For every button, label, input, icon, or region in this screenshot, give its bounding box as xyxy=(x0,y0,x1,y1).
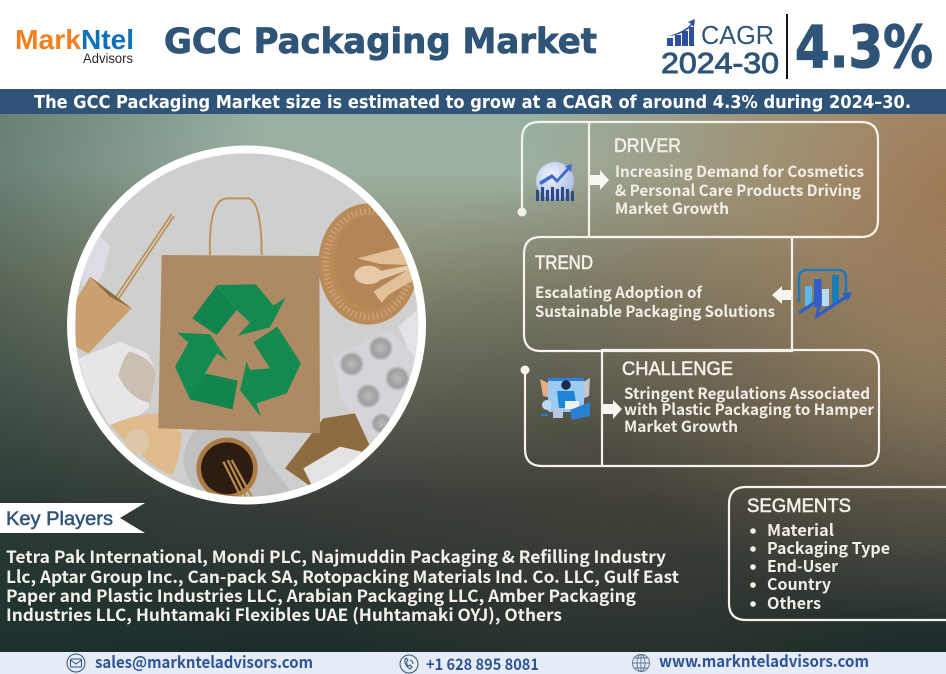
kraft bag xyxy=(210,198,262,255)
heading: challenge: CHALLENGE xyxy=(622,359,733,380)
list: segments: Material xyxy=(767,517,834,541)
text: driver description: Increasing Demand for Cosmetics xyxy=(615,160,864,182)
list: segments: Others xyxy=(767,590,821,614)
background panel xyxy=(0,114,946,652)
logo: MarkNtel Advisors: Advisors xyxy=(83,51,133,66)
white box xyxy=(78,342,157,427)
paper bowl xyxy=(110,413,182,475)
CAGR label: CAGR xyxy=(701,20,774,50)
heading: driver: DRIVER xyxy=(614,136,681,157)
logo: MarkNtel Advisors: Mark xyxy=(15,24,81,55)
ribbon: key players xyxy=(0,503,145,533)
text: challenge description xyxy=(624,382,874,437)
text: challenge description: Market Growth xyxy=(624,415,738,437)
egg carton xyxy=(398,310,418,356)
logo: MarkNtel Advisors: Ntel xyxy=(81,24,134,55)
text: driver description: Market Growth xyxy=(615,197,729,219)
text: key players list: Tetra Pak International, Mondi PLC, Najmuddin Packaging & Refilling Industry xyxy=(6,543,666,568)
icon: CAGR growth chart xyxy=(667,19,695,46)
text: key players list: Industries LLC, Huhtamaki Flexibles UAE (Huhtamaki OYJ), Others xyxy=(6,601,562,626)
heading: trend: TREND xyxy=(535,253,593,274)
logo: MarkNtel Advisors xyxy=(15,24,134,66)
footer band xyxy=(0,648,946,674)
title: GCC Packaging Market xyxy=(164,22,597,62)
text: driver description xyxy=(615,160,864,219)
arrow: driver xyxy=(590,170,609,190)
chopsticks xyxy=(113,214,174,301)
text: email: sales@marknteladvisors.com xyxy=(95,649,313,673)
arrow: trend xyxy=(772,286,792,304)
heading: segments: SEGMENTS xyxy=(747,496,851,517)
panel: driver xyxy=(518,122,878,237)
cutlery xyxy=(358,247,409,265)
CAGR period: 2024-30 xyxy=(661,48,779,80)
text: key players list: Paper and Plastic Industries LLC, Arabian Packaging LLC, Amber Packaging xyxy=(6,582,636,607)
text: trend description xyxy=(535,281,775,322)
panel: challenge xyxy=(520,350,879,466)
photo: packaging items with recycling bag xyxy=(60,140,440,510)
header band xyxy=(0,0,946,89)
napkins xyxy=(285,413,372,488)
icon: trend bar chart xyxy=(799,270,852,316)
list: segments xyxy=(750,517,890,614)
panel: trend xyxy=(524,237,860,351)
text: trend description: Escalating Adoption of xyxy=(535,281,703,303)
ribbon: key players: Key Players xyxy=(6,508,113,530)
text: key players list: Llc, Aptar Group Inc., Can-pack SA, Rotopacking Materials Ind. Co. LLC, Gulf East xyxy=(6,563,679,588)
icon: phone xyxy=(400,655,418,673)
icon: globe xyxy=(632,654,650,672)
text: challenge description: with Plastic Packaging to Hamper xyxy=(624,398,874,420)
text: challenge description: Stringent Regulations Associated xyxy=(624,382,870,404)
text: driver description: & Personal Care Products Driving xyxy=(615,179,861,201)
paper cup xyxy=(76,277,132,353)
plate xyxy=(318,203,418,325)
panel: segments xyxy=(729,487,946,620)
list: segments: Packaging Type xyxy=(767,535,890,559)
list: segments: End-User xyxy=(767,553,838,577)
text: website: www.marknteladvisors.com xyxy=(659,648,869,672)
icon: email xyxy=(67,654,85,672)
list: segments: Country xyxy=(767,571,831,595)
arrow: challenge xyxy=(603,400,622,419)
white tray xyxy=(82,236,110,288)
text: key players list xyxy=(6,543,679,626)
icon: challenge analyst xyxy=(540,378,590,420)
text: trend description: Sustainable Packaging Solutions xyxy=(535,300,775,322)
icon: driver growth team xyxy=(536,162,574,201)
tray and dark cup xyxy=(184,430,290,497)
recycling symbol xyxy=(175,284,301,417)
